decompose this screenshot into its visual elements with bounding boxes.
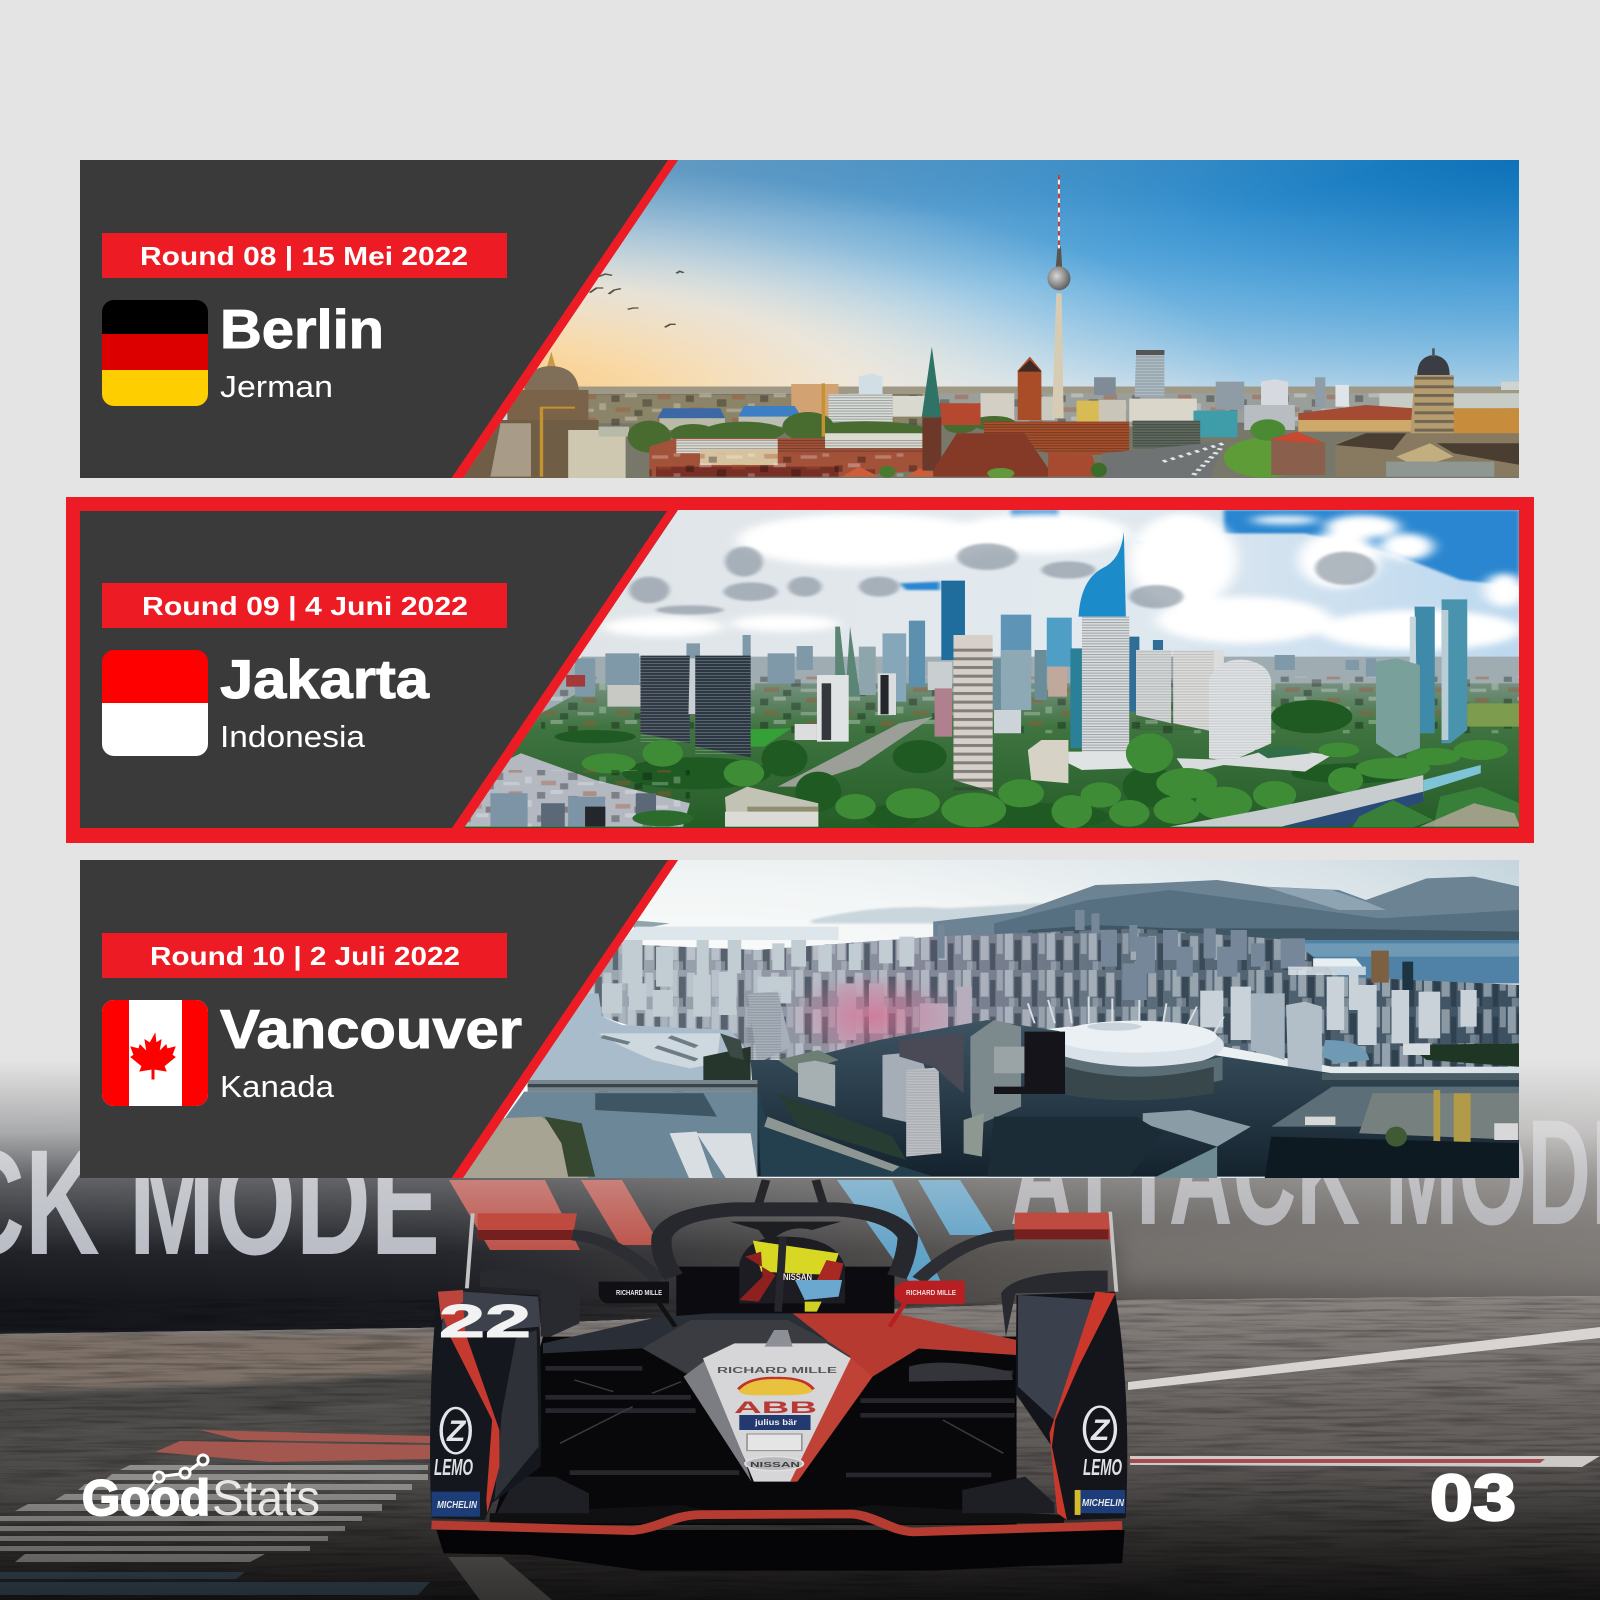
Julius Baer sponsor: julius bär (754, 1418, 797, 1427)
wall haze (1120, 1235, 1600, 1285)
date badge (102, 583, 507, 628)
date badge (102, 233, 507, 278)
panel: Berlin (80, 160, 1520, 480)
chequered start grid (0, 1465, 428, 1562)
Nissan sponsor: NISSAN (750, 1462, 800, 1469)
logo: GoodStats (82, 1455, 320, 1526)
top fade to page colour (0, 1060, 1600, 1300)
blue grid bands (0, 1572, 430, 1595)
panel: Jakarta (80, 510, 1525, 830)
logo network icon (141, 1455, 208, 1499)
date badge (102, 933, 507, 978)
barrier wall (0, 1060, 1600, 1334)
bottom vignette (0, 1480, 1600, 1600)
page number: 03 (1430, 1461, 1516, 1534)
panel background (80, 860, 1519, 1178)
logo word Stats: Stats (212, 1470, 320, 1526)
red chevrons (449, 1180, 660, 1250)
highlight frame: Jakarta round (66, 497, 1534, 843)
country name: Indonesia (220, 719, 366, 754)
nose text: RICHARD MILLE (717, 1366, 838, 1375)
race car (430, 1180, 1127, 1571)
date text: Round 09 | 4 Juni 2022 (142, 591, 468, 621)
z logo right: Z (1090, 1414, 1111, 1447)
diagonal red band (452, 160, 678, 478)
blue chevrons (837, 1180, 995, 1290)
panel: Vancouver (80, 860, 1520, 1180)
red kerb marks (155, 1430, 430, 1462)
sponsor text right Michelin: MICHELIN (1082, 1498, 1125, 1509)
sponsor text left Michelin: MICHELIN (437, 1500, 478, 1511)
background photo: race track scene (0, 1060, 1600, 1600)
city name: Vancouver (220, 998, 522, 1060)
panel background (80, 511, 1519, 828)
date text: Round 08 | 15 Mei 2022 (140, 241, 468, 271)
sponsor text left LEMO: LEMO (434, 1454, 473, 1480)
flag: Germany (102, 300, 208, 406)
logo word Good: Good (82, 1470, 210, 1526)
diagonal red band (452, 511, 677, 828)
date text: Round 10 | 2 Juli 2022 (150, 941, 460, 971)
diagonal red band (452, 860, 678, 1178)
z logo left: Z (446, 1415, 467, 1448)
helmet text: NISSAN (783, 1272, 812, 1282)
city name: Jakarta (220, 648, 429, 710)
photo: Berlin skyline (460, 160, 1520, 480)
track red line (1130, 1456, 1600, 1467)
country name: Jerman (220, 369, 333, 404)
flag: Indonesia (102, 650, 208, 756)
panel background (80, 160, 1519, 478)
car body drawing (430, 1180, 1127, 1571)
flag: Canada (102, 1000, 208, 1106)
city name: Berlin (220, 298, 384, 360)
asphalt streak texture (0, 1298, 1600, 1600)
ABB sponsor: ABB (734, 1398, 817, 1417)
track white line (1128, 1327, 1600, 1390)
track surface (0, 1296, 1600, 1600)
mirror text left: RICHARD MILLE (616, 1290, 662, 1297)
mirror text right: RICHARD MILLE (906, 1290, 956, 1297)
sponsor text right LEMO: LEMO (1083, 1454, 1122, 1480)
track lane mark (448, 1557, 552, 1600)
country name: Kanada (220, 1069, 335, 1104)
photo: Jakarta skyline (460, 510, 1525, 830)
car number 22: 22 (439, 1295, 531, 1347)
asphalt patches (0, 1336, 440, 1392)
photo: Vancouver skyline (460, 860, 1520, 1180)
